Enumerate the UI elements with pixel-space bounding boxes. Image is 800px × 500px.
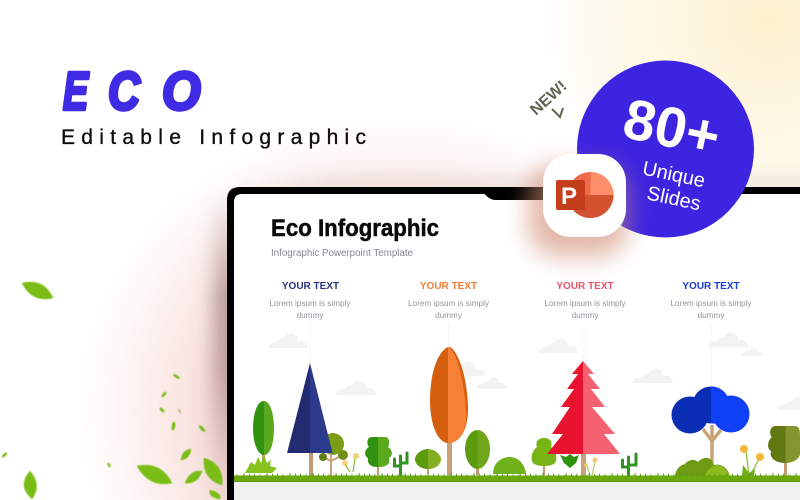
- badge: 80+ unique slides: Slides: [645, 183, 703, 215]
- title: ECO: O: [162, 61, 201, 121]
- column 2 text: YOUR TEXT: [420, 281, 477, 292]
- grass: [234, 470, 800, 482]
- slide heading: Eco Infographic: [271, 215, 439, 242]
- laptop frame: [227, 187, 800, 500]
- column 1 text: YOUR TEXT: [282, 281, 339, 292]
- flowers: dandelion: [740, 445, 764, 476]
- flowers: [342, 453, 359, 472]
- tree: olive: [768, 426, 800, 476]
- tree: blue triangle: [287, 363, 332, 476]
- flowers small: [584, 458, 598, 475]
- column 2 text: dummy: [435, 311, 463, 320]
- slide subheading: Infographic Powerpoint Template: [271, 248, 413, 259]
- cactus: [394, 453, 407, 476]
- title: ECO: [63, 61, 201, 122]
- clouds: [268, 333, 800, 410]
- column 3 text: dummy: [572, 311, 599, 320]
- title: ECO: C: [108, 61, 141, 122]
- new label: NEW!: [527, 78, 570, 119]
- column 4 text: dummy: [698, 311, 725, 320]
- shrub: green cloud: [365, 437, 392, 475]
- icon: powerpoint: [528, 154, 628, 257]
- badge: 80+ unique slides: Unique: [641, 158, 707, 192]
- tree: orange: [430, 347, 468, 475]
- shrub: dark green leaf: [560, 454, 579, 468]
- column 3 text: Lorem ipsum is simply: [545, 299, 626, 308]
- tree: lime small: [532, 438, 556, 475]
- column 1 text: Lorem ipsum is simply: [270, 299, 351, 308]
- badge: 80+ unique slides: [577, 60, 754, 238]
- bush: [493, 457, 526, 474]
- shrub: low green: [415, 449, 441, 474]
- falling leaves: [2, 282, 222, 499]
- tree: red pine: [547, 361, 620, 476]
- column 1 text: dummy: [297, 311, 324, 320]
- tree: small with three crowns: [319, 433, 348, 476]
- bushes: [675, 458, 730, 476]
- icon: powerpoint: P: [561, 183, 577, 210]
- badge: 80+ unique slides: 80+: [618, 87, 726, 169]
- cactus: [622, 454, 636, 476]
- column 4 text: YOUR TEXT: [682, 281, 740, 292]
- title: ECO: E: [63, 61, 90, 121]
- column 2 text: Lorem ipsum is simply: [408, 299, 490, 308]
- tree: tall green: [245, 401, 277, 473]
- tree: blue round: [672, 386, 750, 462]
- subtitle: Editable Infographic: [61, 126, 366, 149]
- column 4 text: [671, 281, 752, 320]
- column 1 text: [270, 281, 351, 320]
- column 3 text: [545, 281, 626, 320]
- column 4 text: Lorem ipsum is simply: [671, 299, 752, 308]
- column 3 text: YOUR TEXT: [556, 281, 614, 292]
- tree: green oval: [465, 430, 490, 475]
- column 2 text: [408, 281, 490, 320]
